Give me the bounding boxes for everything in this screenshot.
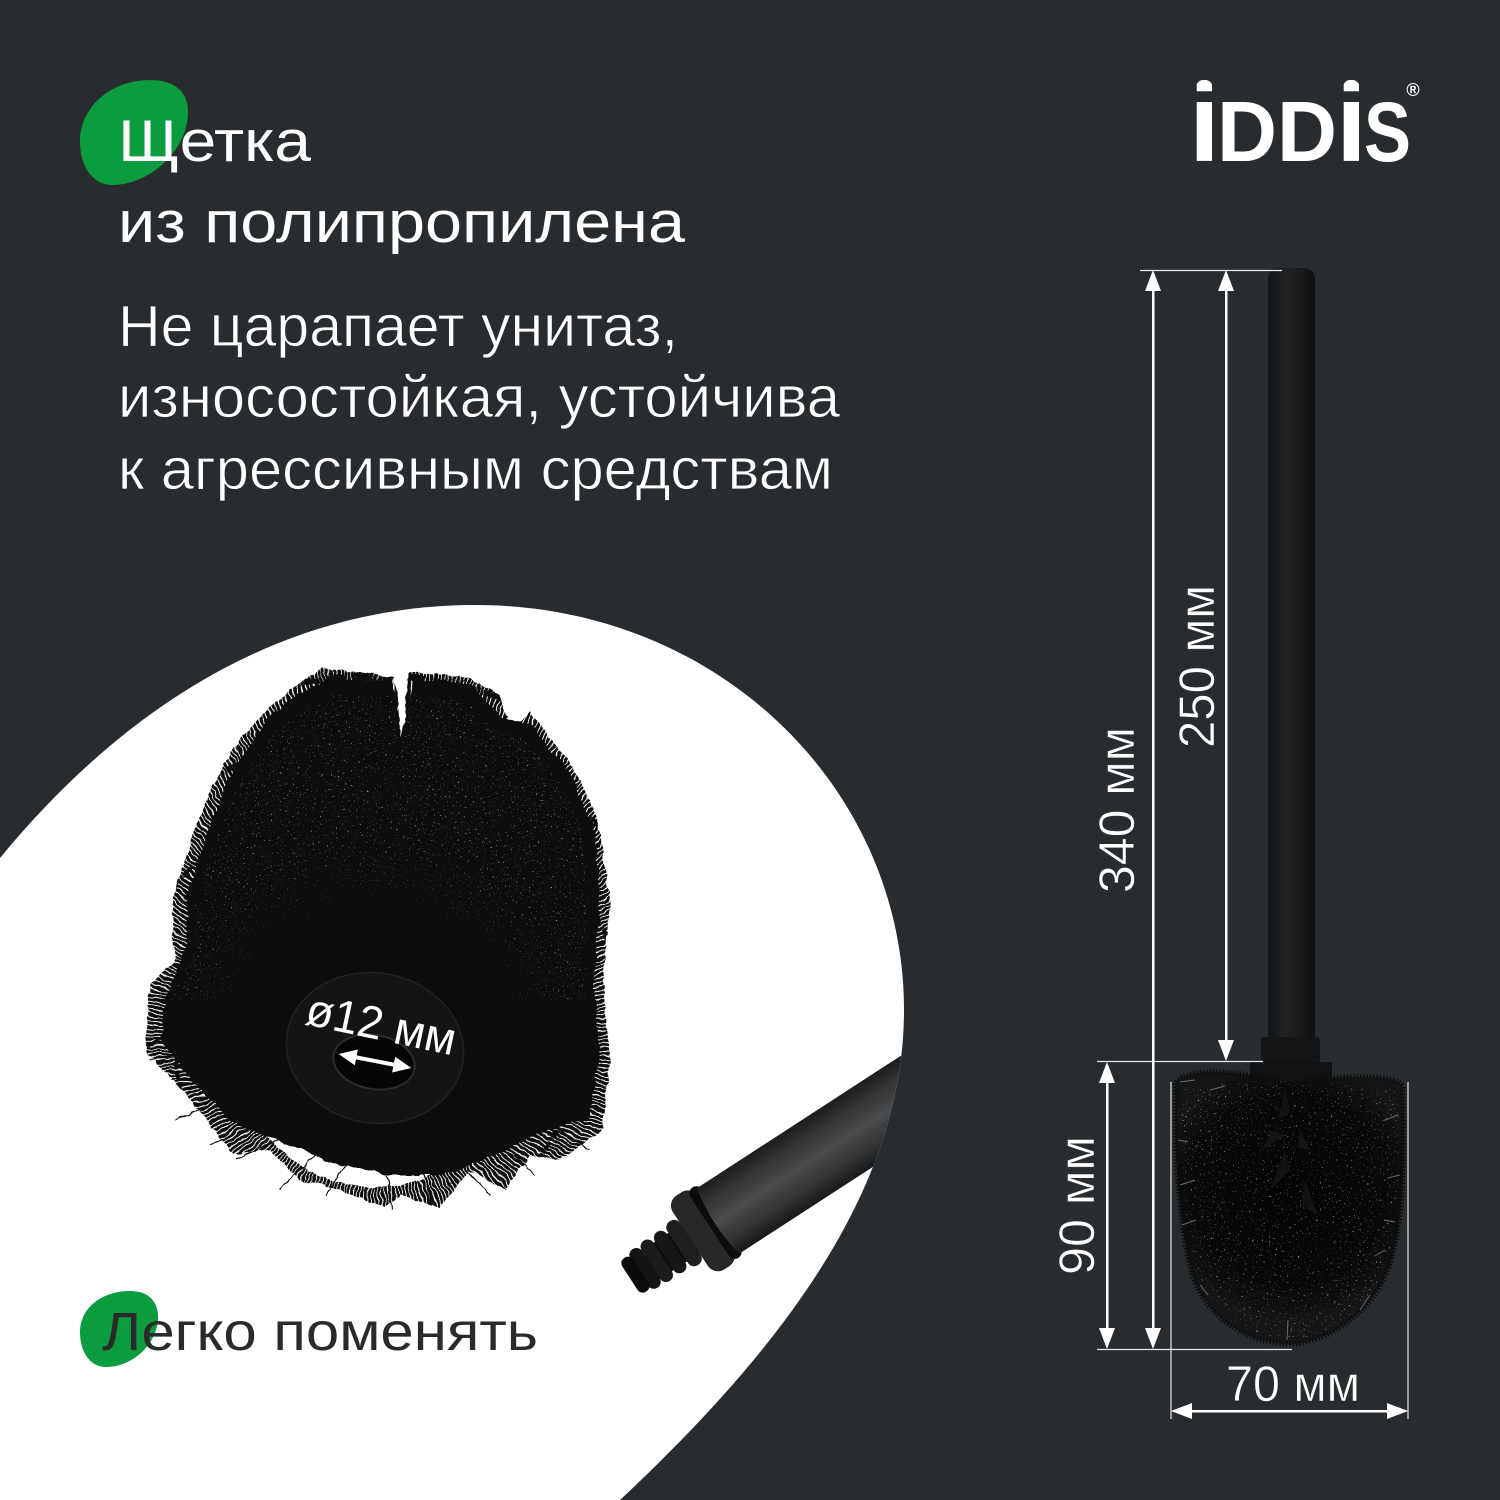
dimension 250 mm (1169, 270, 1234, 1061)
white blob panel (0, 605, 904, 1500)
description text: износостойкая, устойчива (118, 365, 841, 430)
diameter arrow (337, 1046, 413, 1076)
logo: iDDiS: i (1189, 61, 1220, 185)
collar (1261, 1037, 1320, 1063)
threaded tip (621, 1220, 702, 1293)
hub body (290, 945, 470, 1050)
head highlights (1178, 1080, 1400, 1340)
dimension 70 mm (1171, 1356, 1408, 1419)
dimension 70 mm: 70 мм (1226, 1356, 1360, 1412)
hub washer (274, 959, 476, 1137)
brush head close-up (145, 668, 611, 1210)
hub hole (329, 1028, 419, 1096)
dimension guide lines (1097, 270, 1408, 1419)
collar (670, 1190, 734, 1272)
dimension 340 mm (1089, 270, 1161, 1349)
title: Щетка (118, 109, 312, 174)
dimension 90 mm: 90 мм (1049, 1136, 1105, 1275)
title: из полипропилена (118, 190, 686, 255)
dimension 250 mm: 250 мм (1169, 585, 1225, 748)
logo: iDDiS: S (1364, 85, 1411, 179)
bristle hairs (145, 668, 611, 1210)
bristle texture (1180, 1081, 1399, 1340)
logo: iDDiS: i (1336, 61, 1367, 185)
rod (697, 1056, 902, 1254)
dimension 340 mm: 340 мм (1089, 727, 1145, 893)
description text: Не царапает унитаз, (118, 294, 678, 359)
logo: iDDiS: D (1277, 85, 1337, 180)
description text: к агрессивным средствам (118, 437, 833, 502)
green accent blob: caption (80, 1291, 158, 1367)
bristle texture (170, 695, 590, 1000)
bristle head (1175, 1072, 1404, 1344)
shaft (1268, 268, 1315, 1040)
diameter label: ø12 мм (302, 983, 461, 1065)
green accent blob: title (80, 80, 188, 185)
full product: brush (1175, 268, 1404, 1344)
head spine (1262, 1088, 1318, 1215)
logo: iDDiS (1189, 61, 1420, 185)
logo: iDDiS: ® (1406, 80, 1420, 100)
dimension 90 mm (1049, 1062, 1115, 1349)
stray bristles (145, 1000, 605, 1208)
logo: iDDiS: D (1217, 85, 1277, 180)
title (118, 109, 686, 255)
handle close-up (621, 1056, 902, 1293)
base (1250, 1062, 1332, 1084)
description text (118, 294, 841, 502)
caption: Легко поменять (102, 1302, 538, 1362)
